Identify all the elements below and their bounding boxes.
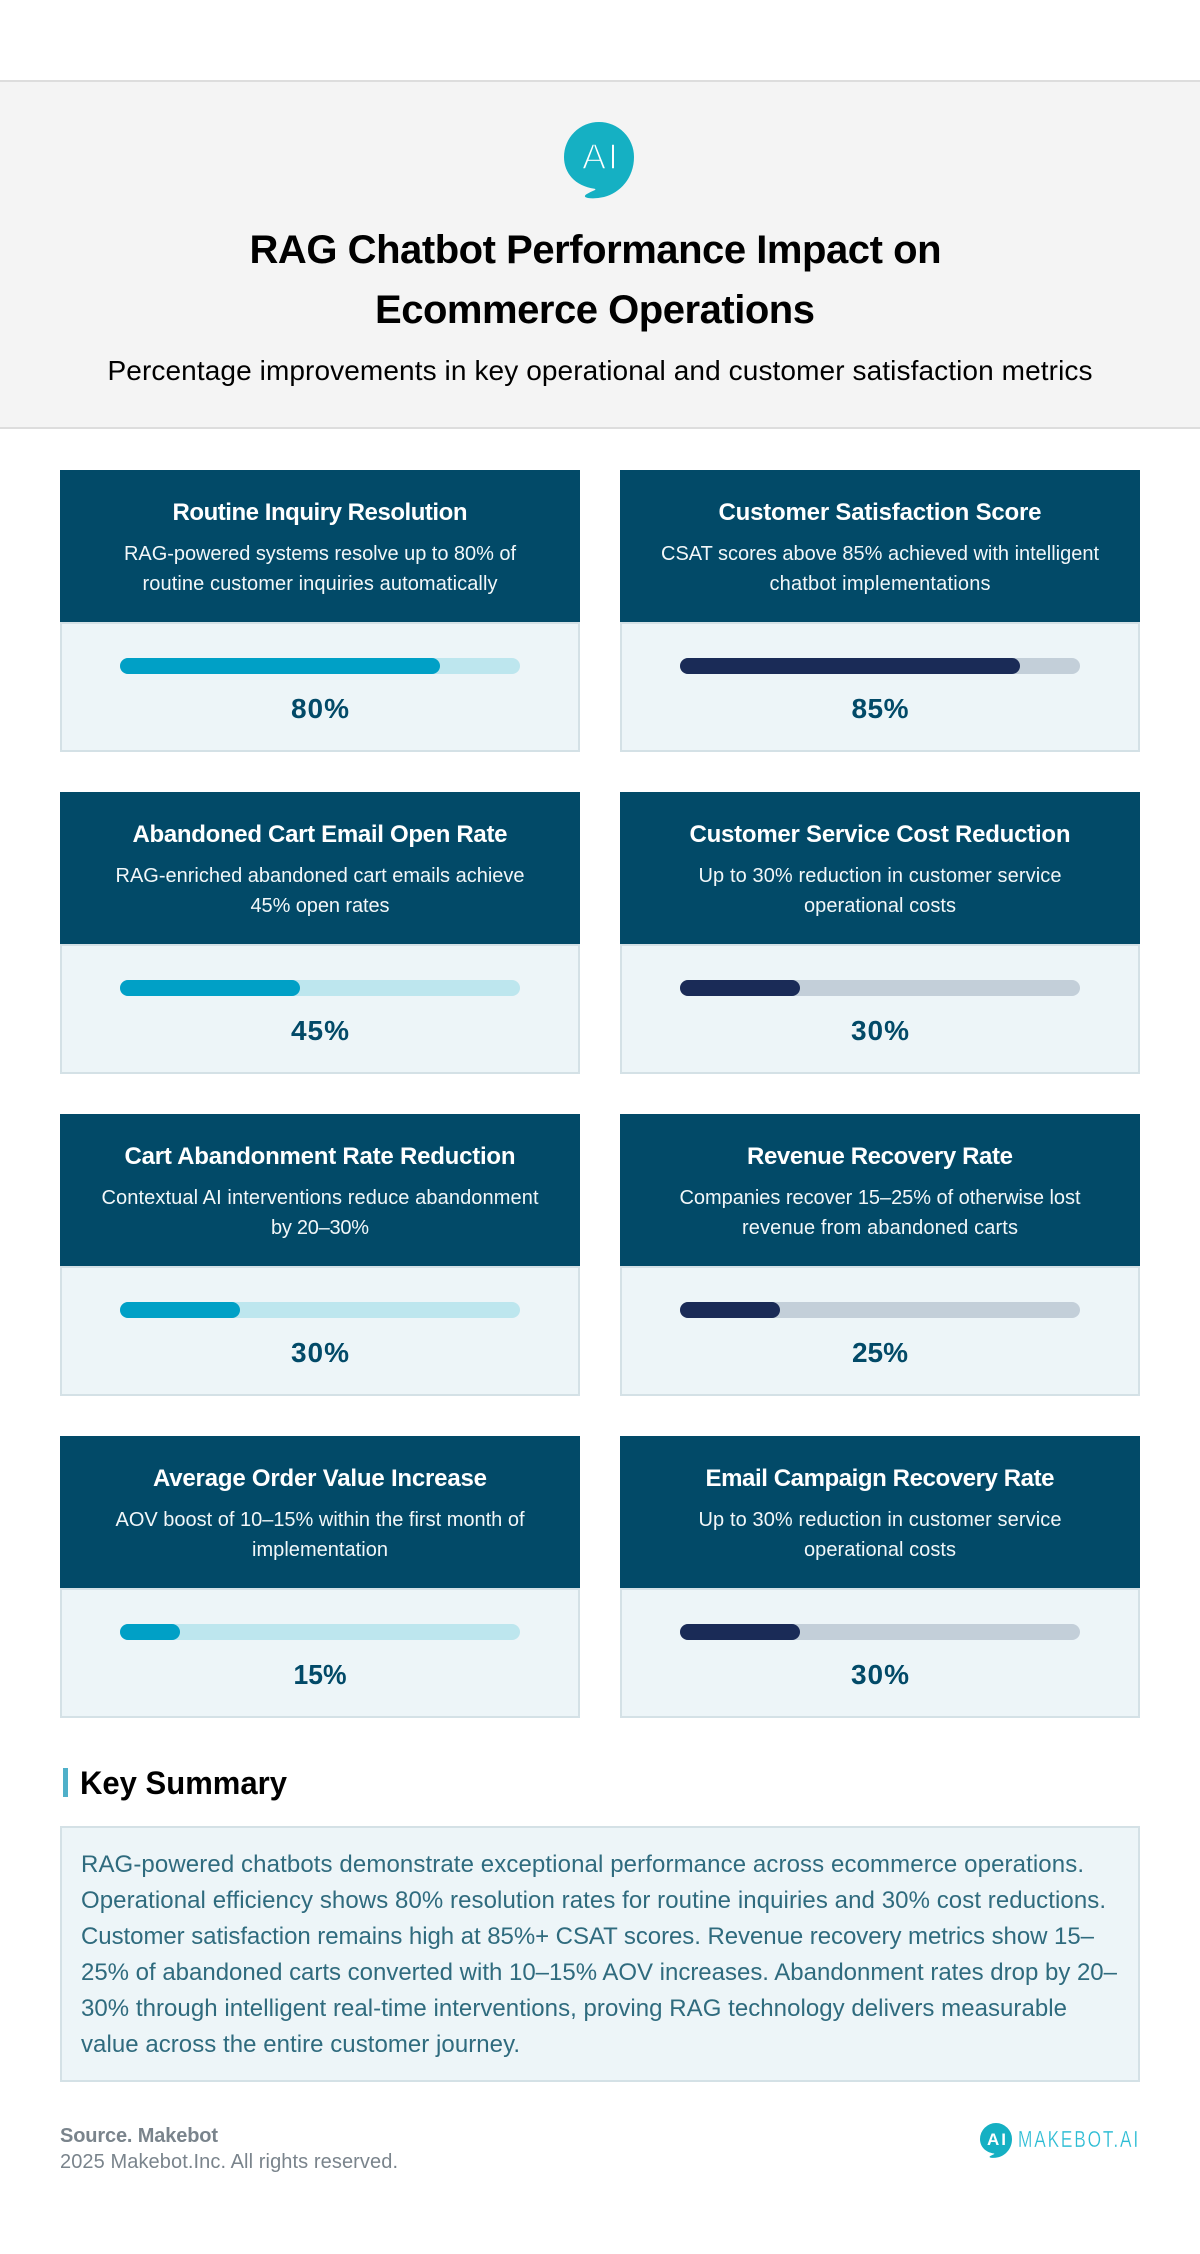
logo: Makebot.AI: AI	[987, 2130, 1006, 2149]
panel: Customer Service Cost Reduction: 30%	[851, 1015, 909, 1046]
panel: Cart Abandonment Rate Reduction: Contextual AI interventions reduce abandonment	[102, 1187, 539, 1209]
panel: summary text	[61, 1827, 1139, 2081]
panel: Routine Inquiry Resolution: routine customer inquiries automatically	[142, 573, 498, 595]
title: Ecommerce Operations	[375, 288, 815, 332]
panel: Email Campaign Recovery Rate	[620, 1436, 1140, 1717]
panel: Cart Abandonment Rate Reduction: Cart Abandonment Rate Reduction	[124, 1143, 516, 1170]
panel: Revenue Recovery Rate	[620, 1114, 1140, 1395]
header panel	[0, 80, 1200, 429]
panel: Cart Abandonment Rate Reduction: 30%	[291, 1337, 349, 1368]
panel: summary text: Customer satisfaction remains high at 85%+ CSAT scores. Revenue recovery metrics show 15–	[81, 1923, 1095, 1950]
panel: Revenue Recovery Rate: revenue from abandoned carts	[742, 1217, 1018, 1239]
panel: Routine Inquiry Resolution: RAG-powered systems resolve up to 80% of	[124, 543, 516, 565]
panel: summary text: Operational efficiency shows 80% resolution rates for routine inquiries and 30% cost reductions.	[81, 1887, 1106, 1914]
footer source: Source. Makebot	[60, 2125, 218, 2147]
panel: Email Campaign Recovery Rate: operational costs	[804, 1539, 956, 1561]
panel: Routine Inquiry Resolution	[60, 470, 580, 751]
panel: Average Order Value Increase: AOV boost of 10–15% within the first month of	[116, 1509, 525, 1531]
panel: Customer Service Cost Reduction: Up to 30% reduction in customer service	[698, 865, 1062, 887]
panel: Revenue Recovery Rate: Companies recover 15–25% of otherwise lost	[680, 1187, 1081, 1209]
panel: Abandoned Cart Email Open Rate: 45%	[291, 1015, 349, 1046]
logo: Makebot.AI	[980, 2123, 1140, 2158]
panel: Customer Service Cost Reduction: operational costs	[804, 895, 956, 917]
panel: Average Order Value Increase: implementation	[252, 1539, 388, 1561]
panel: Routine Inquiry Resolution: 80%	[291, 693, 349, 724]
heading: Key Summary: Key Summary	[80, 1765, 287, 1801]
panel: Abandoned Cart Email Open Rate: RAG-enriched abandoned cart emails achieve	[116, 865, 524, 887]
footer source: 2025 Makebot.Inc. All rights reserved.	[60, 2151, 398, 2173]
panel: Revenue Recovery Rate: Revenue Recovery Rate	[747, 1143, 1013, 1170]
panel: Customer Satisfaction Score: Customer Satisfaction Score	[718, 499, 1042, 526]
icon: AI chat bubble	[564, 122, 634, 198]
panel: Customer Satisfaction Score: 85%	[852, 693, 909, 724]
panel: Abandoned Cart Email Open Rate: Abandoned Cart Email Open Rate	[132, 821, 508, 848]
panel: Abandoned Cart Email Open Rate: 45% open rates	[250, 895, 390, 917]
panel: summary text: 30% through intelligent real-time interventions, proving RAG technology delivers measurable	[81, 1995, 1067, 2022]
panel: Cart Abandonment Rate Reduction	[60, 1114, 580, 1395]
panel: summary text: RAG-powered chatbots demonstrate exceptional performance across ecommerce operations.	[81, 1851, 1084, 1878]
panel: Customer Satisfaction Score	[620, 470, 1140, 751]
icon: AI chat bubble: AI	[582, 136, 618, 177]
panel: Customer Service Cost Reduction	[620, 792, 1140, 1073]
panel: Average Order Value Increase	[60, 1436, 580, 1717]
panel: summary text: 25% of abandoned carts converted with 10–15% AOV increases. Abandonment rates drop by 20–	[81, 1959, 1118, 1986]
panel: Customer Satisfaction Score: chatbot implementations	[770, 573, 990, 595]
panel: Routine Inquiry Resolution: Routine Inquiry Resolution	[172, 499, 468, 526]
panel: Customer Service Cost Reduction: Customer Service Cost Reduction	[690, 821, 1070, 848]
panel: Email Campaign Recovery Rate: Email Campaign Recovery Rate	[706, 1465, 1054, 1492]
footer source	[60, 2125, 398, 2173]
panel: Average Order Value Increase: Average Order Value Increase	[153, 1465, 487, 1492]
title: RAG Chatbot Performance Impact on	[250, 228, 942, 272]
logo: Makebot.AI: MAKEBOT.AI	[1018, 2126, 1140, 2152]
panel: Customer Satisfaction Score: CSAT scores above 85% achieved with intelligent	[661, 543, 1099, 565]
subtitle: Percentage improvements in key operational and customer satisfaction metrics	[108, 355, 1092, 386]
panel: summary text: value across the entire customer journey.	[81, 2031, 520, 2058]
panel: Cart Abandonment Rate Reduction: by 20–30%	[271, 1217, 369, 1239]
panel: Email Campaign Recovery Rate: 30%	[851, 1659, 909, 1690]
title	[250, 228, 942, 332]
panel: Abandoned Cart Email Open Rate	[60, 792, 580, 1073]
panel: Average Order Value Increase: 15%	[294, 1659, 347, 1690]
panel: Email Campaign Recovery Rate: Up to 30% reduction in customer service	[698, 1509, 1062, 1531]
panel: Revenue Recovery Rate: 25%	[852, 1337, 908, 1368]
